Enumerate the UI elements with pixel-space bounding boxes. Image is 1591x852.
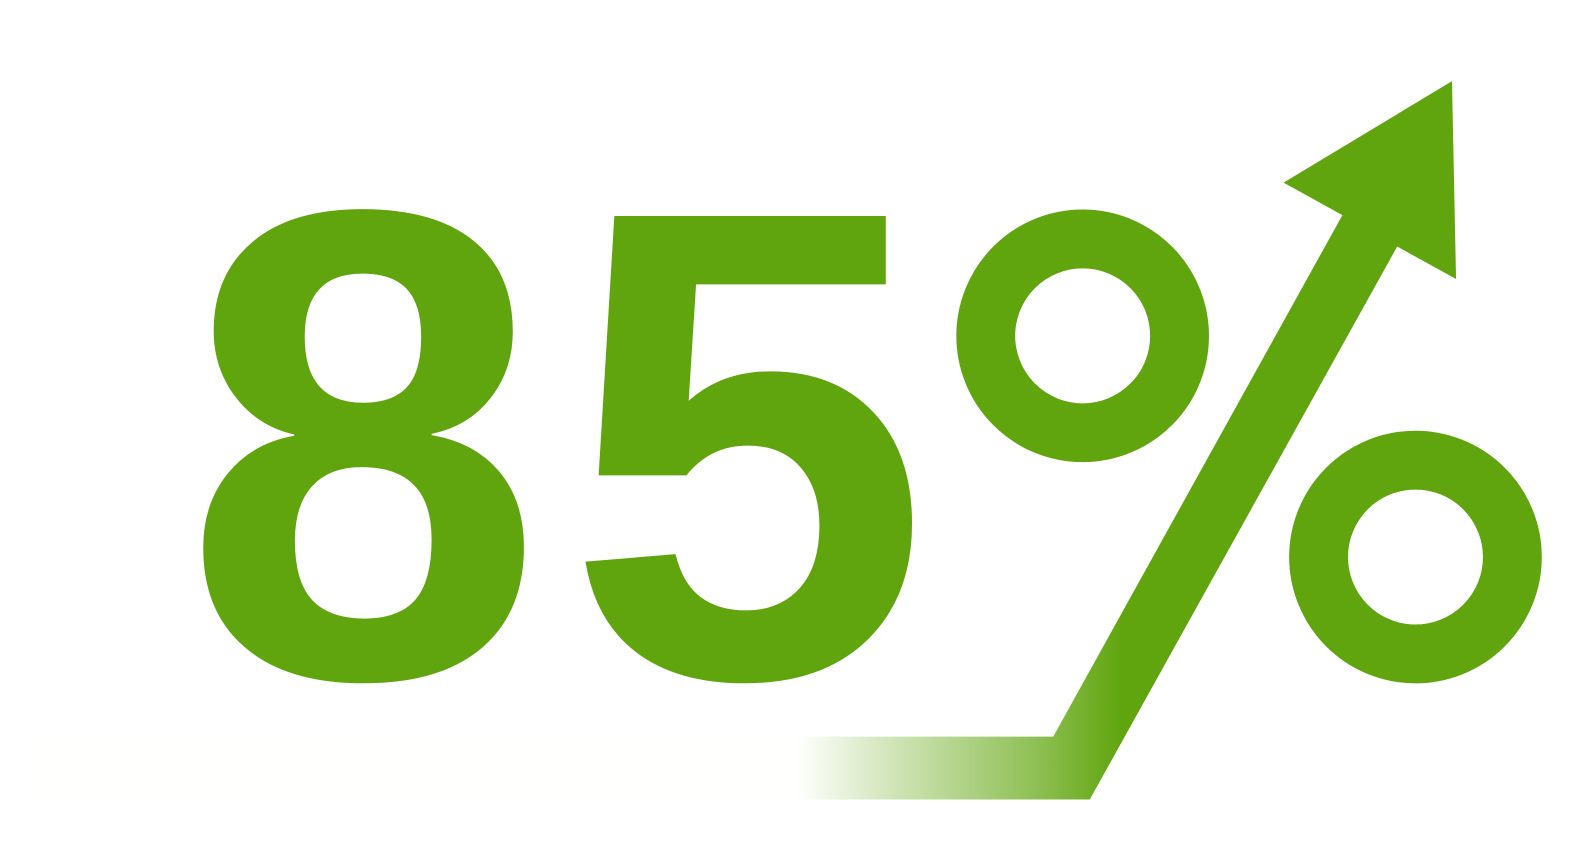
percent sign: upper ring [986,239,1180,433]
faint band under the arrow tail [30,737,797,800]
digit 5: 5 [565,71,930,819]
arrow forming the percent slash [797,81,1456,800]
digit 8: 8 [183,71,544,819]
percent sign: lower ring [1319,460,1512,654]
